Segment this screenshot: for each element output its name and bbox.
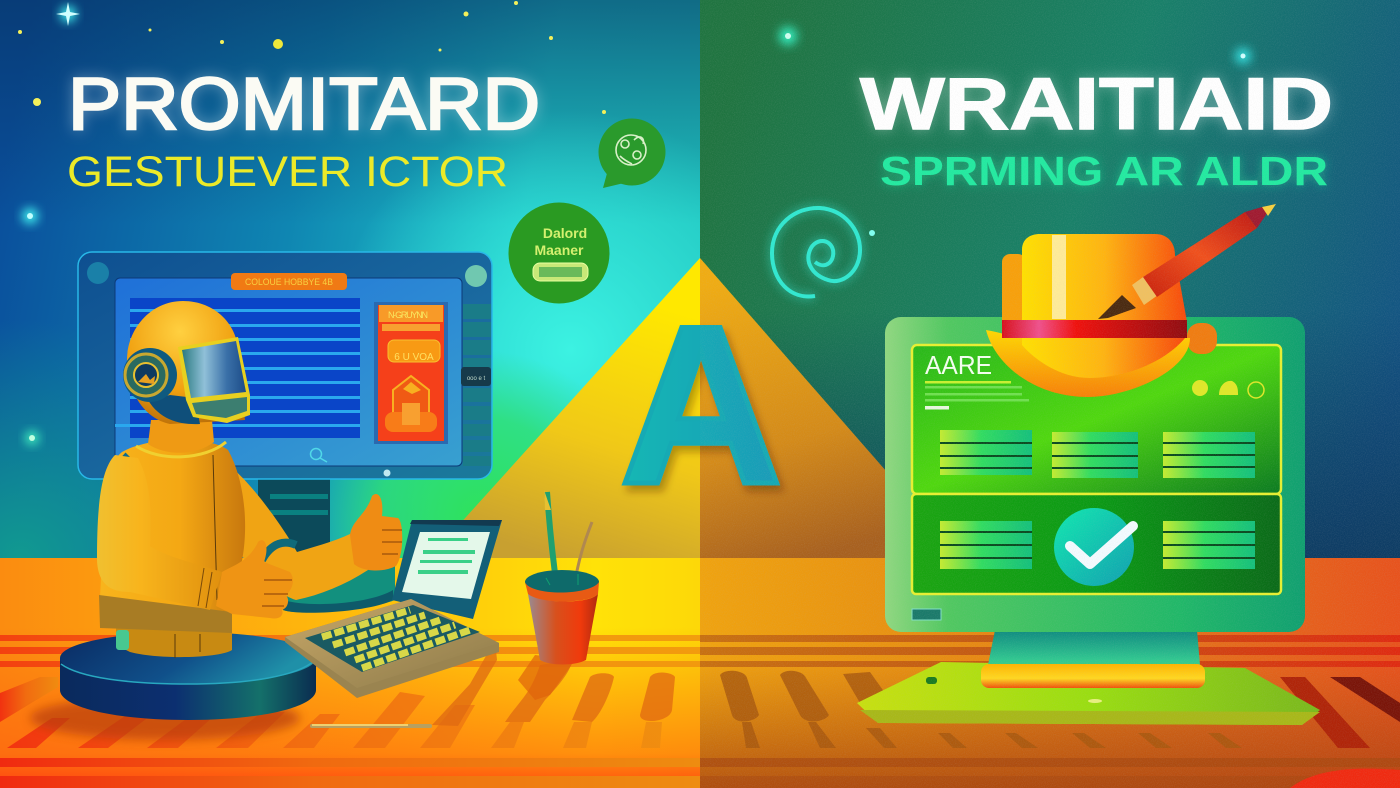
near arm [97,455,293,618]
knob [1187,323,1217,354]
left monitor stand [258,478,395,613]
text lines [925,381,1029,410]
neck [148,420,214,453]
backpack strap [107,455,128,545]
hard hat [986,234,1217,397]
left wall background [0,0,700,560]
bar block 5 [1163,521,1255,569]
side flap [1002,254,1026,346]
crown lower [1022,338,1185,378]
side vents [463,304,491,466]
list panel [115,298,360,438]
screen [912,345,1281,594]
title right: WRAITIAID [860,64,1333,145]
cup shadow [518,655,575,700]
bar block 1 [940,430,1032,475]
title tab [231,273,347,290]
heading AARE: AARE [925,350,992,380]
visor [178,337,250,423]
red panel: N·GRUYNN [388,310,428,320]
ear ring [123,348,177,402]
check badge [1054,508,1134,586]
platform [60,632,316,720]
badge: Dalord Maaner: Maaner [534,242,584,258]
right floor paddle shadows [720,671,1242,748]
left floor stripes [0,635,700,788]
right monitor [885,317,1305,632]
left monitor [78,252,492,479]
grain texture right half [700,0,1400,788]
speech bubble icon [598,118,666,188]
right floor stripes [700,635,1400,788]
near hand thumbs up [216,540,293,618]
dome [1022,234,1187,340]
pencil on desk [310,724,432,728]
hips [116,625,232,657]
monitor knobs [87,262,487,287]
bar block 4 [940,521,1032,569]
bar block 2 [1052,432,1138,478]
right monitor base [857,662,1320,725]
band [1002,320,1187,338]
platform shadow [30,696,300,740]
at-sign spiral [772,208,860,297]
badge: Dalord Maaner: Dalord [543,225,587,241]
right monitor stand [981,630,1205,688]
red panel [374,302,448,444]
screen [115,278,462,466]
bar block 3 [1163,432,1255,478]
magnifier icon [310,448,327,462]
title tab: COLOUE HOBBYE 4B [245,277,333,287]
left paddle shadows [432,640,675,726]
left floor [0,558,700,788]
pyramid [429,258,962,558]
fountain pen [1098,204,1276,319]
small icons [1192,380,1264,398]
side badge: ooo e t [467,376,486,382]
brim bowl [986,330,1190,397]
pencil cup [525,490,599,664]
tablet [392,520,502,619]
sparkles and dots left [18,1,606,445]
model label [912,609,941,620]
glows right [779,27,1251,236]
right floor [700,558,1400,788]
far arm [218,465,402,600]
keyboard [285,599,499,698]
badge: Dalord Maaner [508,202,610,304]
helmet [123,301,250,424]
red panel: 6 U VOA [394,352,434,363]
subtitle right: SPRMING AR ALDR [880,148,1328,194]
body [99,440,245,658]
title left: PROMITARD [68,64,540,145]
robot figure [97,301,402,658]
right wall background [700,0,1400,560]
side badge [461,367,491,386]
far hand thumbs up [350,494,402,570]
subtitle left: GESTUEVER ICTOR [67,148,508,196]
big letter A: A [619,278,783,531]
belt [99,595,232,633]
